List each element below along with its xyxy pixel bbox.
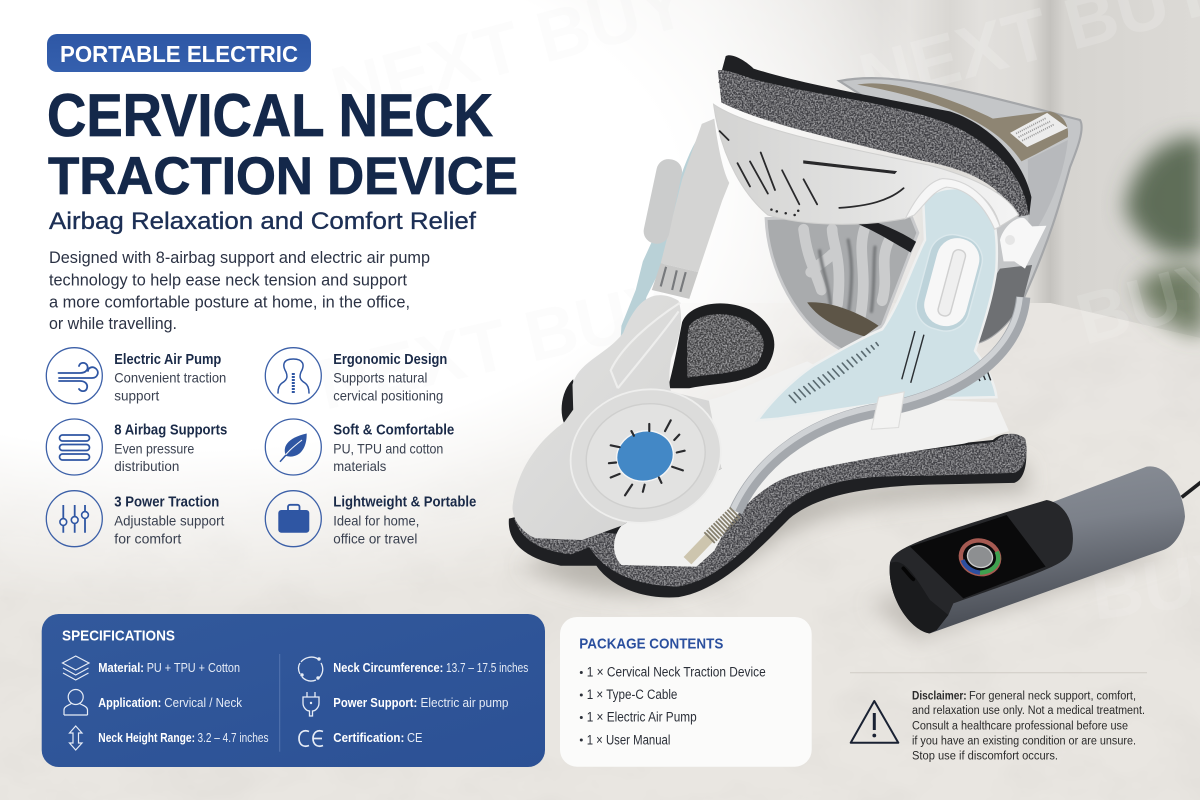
side ear pad	[668, 303, 774, 388]
spec: material: PU + TPU + Cotton	[147, 661, 240, 675]
back shell	[839, 78, 1082, 344]
watermarks: NEXT BUY	[311, 266, 683, 426]
feature: 8 airbag supports: 8 Airbag Supports	[114, 423, 227, 439]
disclaimer text	[912, 690, 1145, 763]
package list	[580, 665, 766, 747]
spec: power support	[303, 692, 509, 716]
spec: application	[64, 690, 243, 715]
spec: neck circumference	[298, 657, 528, 681]
package list: 1 × User Manual	[587, 732, 670, 747]
air hose	[687, 297, 1023, 561]
intro paragraph: technology to help ease neck tension and support	[49, 270, 407, 290]
title: TRACTION DEVICE	[48, 147, 518, 206]
package heading: PACKAGE CONTENTS	[579, 636, 723, 653]
title: CERVICAL NECK	[47, 82, 493, 149]
grey lower plate	[512, 295, 721, 540]
product: electric air pump	[870, 466, 1200, 640]
spec: certification: Certification:	[333, 731, 404, 745]
white base wing	[614, 361, 1009, 567]
feature: ergonomic design: Ergonomic Design	[333, 352, 447, 368]
power cord	[1182, 482, 1200, 497]
title	[47, 82, 518, 206]
product ground shadow	[521, 461, 1029, 594]
disclaimer	[850, 673, 1147, 763]
feature: electric air pump: Convenient traction	[114, 370, 226, 386]
spec: power support: Electric air pump	[420, 696, 509, 710]
disclaimer text: Stop use if discomfort occurs.	[912, 751, 1058, 763]
spec: neck height range: Neck Height Range:	[98, 731, 195, 745]
feature: ergonomic design: cervical positioning	[333, 388, 443, 404]
spec: neck height range	[70, 726, 268, 750]
spec: certification	[299, 731, 422, 746]
spec: neck circumference: Neck Circumference:	[333, 661, 443, 675]
blue air valve disc	[555, 373, 736, 539]
feature: 3 power traction	[46, 491, 224, 547]
product: cervical neck traction device	[509, 55, 1082, 598]
package list: 1 × Type-C Cable	[587, 687, 677, 702]
inner airbag	[766, 215, 918, 351]
white slide knob	[920, 233, 984, 331]
disclaimer text: Disclaimer:	[912, 690, 967, 702]
upper collar felt padding	[718, 55, 1031, 217]
feature: soft and comfortable: PU, TPU and cotton	[333, 440, 443, 456]
feature: 8 airbag supports	[46, 419, 227, 475]
badge: portable electric	[47, 34, 311, 72]
disclaimer text: Consult a healthcare professional before use	[912, 720, 1128, 732]
feature: ergonomic design: Supports natural	[333, 370, 427, 386]
panel: specifications	[42, 614, 545, 767]
left support arm	[620, 119, 729, 377]
pump body	[890, 466, 1185, 633]
icon: warning triangle	[851, 701, 898, 743]
features grid	[46, 348, 476, 547]
feature: 3 power traction: 3 Power Traction	[114, 495, 219, 511]
feature: ergonomic design	[265, 348, 447, 404]
intro paragraph: or while travelling.	[49, 314, 177, 333]
spec: material: Material:	[98, 661, 144, 675]
spec: certification: CE	[407, 731, 422, 745]
feature: 8 airbag supports: distribution	[114, 458, 179, 474]
spec: application: Cervical / Neck	[164, 696, 243, 710]
feature: lightweight and portable: Ideal for home,	[333, 512, 419, 528]
feature: lightweight and portable: office or travel	[333, 530, 417, 546]
disclaimer text: For general neck support, comfort,	[969, 690, 1136, 702]
feature: soft and comfortable	[265, 419, 454, 475]
lower black base and felt	[509, 379, 1027, 598]
feature: soft and comfortable: materials	[333, 458, 386, 474]
intro paragraph: a more comfortable posture at home, in the office,	[49, 292, 410, 312]
package list: 1 × Cervical Neck Traction Device	[587, 665, 766, 680]
spec: material	[62, 656, 240, 680]
upper collar shell	[714, 104, 1019, 229]
spec: neck circumference: 13.7 – 17.5 inches	[446, 661, 528, 675]
feature: electric air pump: Electric Air Pump	[114, 352, 221, 368]
panel: package contents	[560, 617, 812, 767]
disclaimer text: and relaxation use only. Not a medical treatment.	[912, 705, 1145, 717]
spec: application: Application:	[98, 696, 161, 710]
feature: 3 power traction: Adjustable support	[114, 512, 224, 528]
badge: portable electric: PORTABLE ELECTRIC	[60, 41, 298, 67]
intro paragraph: Designed with 8-airbag support and electric air pump	[49, 248, 430, 267]
package list: 1 × Electric Air Pump	[587, 710, 697, 725]
intro paragraph	[49, 248, 430, 333]
feature: electric air pump: support	[114, 388, 159, 404]
spec: power support: Power Support:	[333, 696, 417, 710]
feature: electric air pump	[46, 348, 226, 404]
specifications heading: SPECIFICATIONS	[62, 628, 175, 645]
pale blue neck bracket	[757, 188, 997, 420]
feature: 3 power traction: for comfort	[114, 530, 181, 546]
pump screen with ring display	[903, 515, 1046, 598]
feature: 8 airbag supports: Even pressure	[114, 440, 194, 456]
subtitle: Airbag Relaxation and Comfort Relief	[49, 208, 476, 235]
watermarks	[311, 0, 1200, 636]
spec: neck height range: 3.2 – 4.7 inches	[198, 731, 268, 745]
disclaimer text: if you have an existing condition or are unsure.	[912, 735, 1136, 747]
feature: soft and comfortable: Soft & Comfortable	[333, 423, 454, 439]
feature: lightweight and portable	[265, 491, 476, 547]
pump shadow	[870, 540, 1173, 640]
white side connector	[1000, 218, 1046, 269]
feature: lightweight and portable: Lightweight & Portable	[333, 495, 476, 511]
hose clip	[871, 392, 904, 429]
